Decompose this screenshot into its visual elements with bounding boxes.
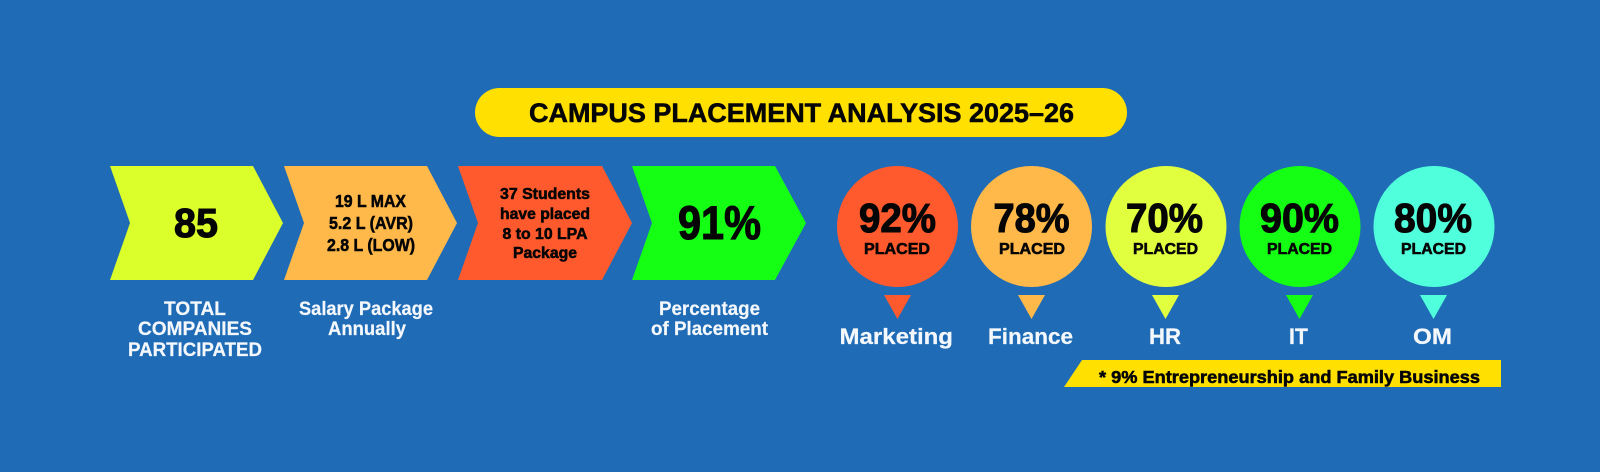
circle: finance 78%: 78% [994, 195, 1070, 241]
icon: marketing pointer [884, 295, 911, 319]
chevron: salary figures: 2.8 L (LOW) [327, 235, 415, 255]
title: CAMPUS PLACEMENT ANALYSIS 2025–26 [529, 98, 1074, 128]
panel: IT [1240, 166, 1360, 349]
circle: HR 70%: 70% [1126, 195, 1203, 241]
circle: OM 80%: PLACED [1401, 241, 1466, 258]
label: percentage of placement [651, 299, 769, 340]
label: HR: HR [1149, 324, 1181, 349]
icon: finance pointer [1018, 295, 1045, 319]
chevron: 91% [632, 166, 806, 280]
circle: finance 78%: PLACED [999, 241, 1065, 258]
panel: marketing [837, 166, 958, 349]
label: percentage of placement: of Placement [651, 319, 769, 340]
circle: IT 90% [1240, 166, 1360, 287]
icon: OM pointer [1420, 295, 1447, 319]
label: marketing: Marketing [840, 324, 953, 349]
circle: OM 80%: 80% [1394, 195, 1472, 241]
circle: HR 70% [1106, 166, 1226, 287]
label: salary package annually [299, 299, 433, 340]
label: IT: IT [1289, 324, 1309, 349]
panel: HR [1106, 166, 1226, 349]
label: total companies participated: PARTICIPATED [128, 340, 262, 361]
panel: total companies [110, 166, 283, 361]
label: OM: OM [1413, 324, 1452, 349]
circle: marketing 92%: 92% [859, 195, 936, 241]
panel: percentage of placement [632, 166, 806, 340]
callout: entrepreneurship note [1064, 360, 1501, 387]
chevron: 85: 85 [174, 200, 218, 246]
callout: entrepreneurship note: * 9% Entrepreneurship and Family Business [1099, 367, 1480, 387]
label: salary package annually: Salary Package [299, 299, 433, 320]
chevron: salary figures: 19 L MAX [335, 191, 406, 211]
circle: OM 80% [1374, 166, 1494, 287]
chevron: students placed: 8 to 10 LPA [502, 226, 588, 243]
chevron: students placed [458, 166, 632, 280]
label: percentage of placement: Percentage [659, 299, 760, 320]
circle: finance 78% [971, 166, 1092, 287]
label: total companies participated: TOTAL [164, 299, 226, 320]
label: total companies participated [128, 299, 262, 361]
chevron: students placed: have placed [500, 206, 590, 223]
chevron: salary figures: 5.2 L (AVR) [329, 213, 413, 233]
circle: IT 90%: PLACED [1267, 241, 1332, 258]
icon: IT pointer [1286, 295, 1313, 319]
chevron: students placed: 37 Students [500, 186, 590, 203]
circle: IT 90%: 90% [1260, 195, 1339, 241]
label: total companies participated: COMPANIES [138, 319, 252, 340]
chevron: 85 [110, 166, 283, 280]
title [475, 88, 1127, 137]
label: salary package annually: Annually [328, 319, 406, 340]
chevron: students placed: Package [513, 245, 577, 262]
panel: finance [971, 166, 1092, 349]
circle: marketing 92% [837, 166, 958, 287]
chevron: salary figures [284, 166, 457, 280]
label: finance: Finance [988, 324, 1073, 349]
panel: OM [1374, 166, 1494, 349]
chevron: 91%: 91% [678, 196, 761, 249]
circle: marketing 92%: PLACED [864, 241, 930, 258]
panel: salary package [284, 166, 457, 340]
circle: HR 70%: PLACED [1133, 241, 1198, 258]
icon: HR pointer [1152, 295, 1179, 319]
